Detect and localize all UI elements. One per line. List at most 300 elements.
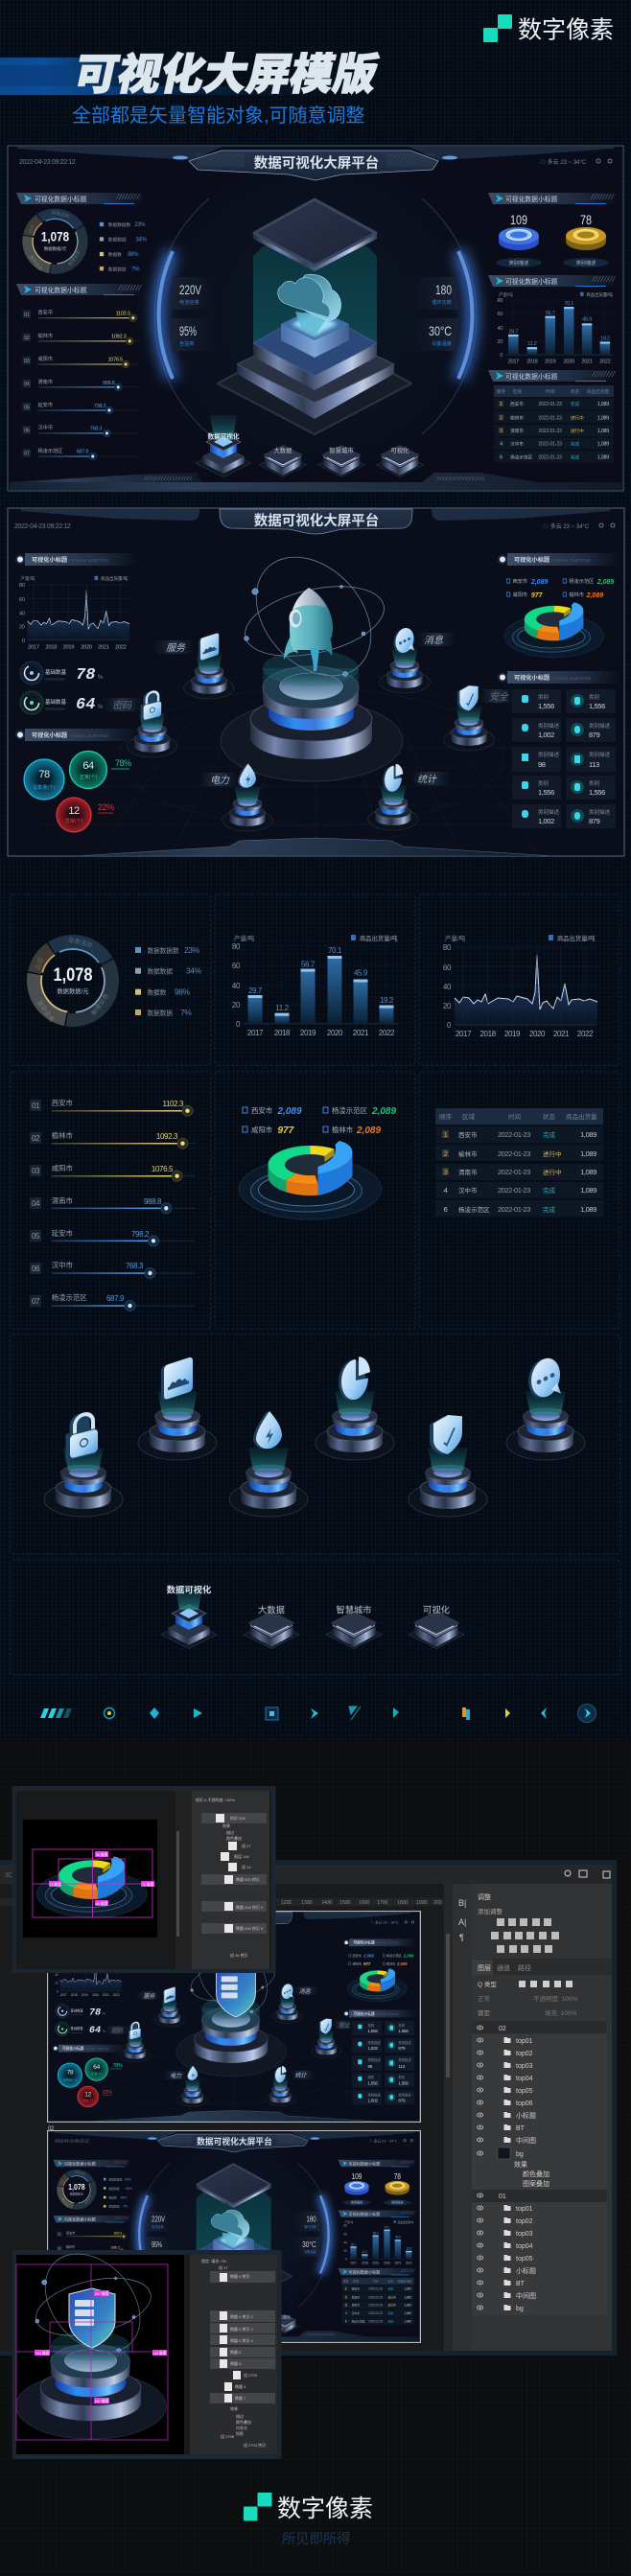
- icon: arrow: [505, 1708, 510, 1718]
- ranking list: 1092.3: [156, 1132, 178, 1141]
- data table: [435, 1108, 603, 1217]
- bar chart: 19.2: [380, 996, 394, 1005]
- magenta measure guides: [16, 2264, 168, 2440]
- layer rows: 组 36 拷贝: [230, 1952, 248, 1958]
- logo: brand bottom: 数字像素: [277, 2495, 373, 2522]
- layer rows: 描边: [226, 1829, 234, 1835]
- card grid: 类别描述: [589, 722, 611, 730]
- ranking list: 05: [32, 1232, 40, 1241]
- stat panels: 180: [435, 282, 452, 297]
- layer list: bg: [516, 2306, 524, 2312]
- data table: 1,089: [580, 1130, 596, 1139]
- card grid: 类别描述: [538, 808, 560, 816]
- bottom frame bar: [10, 473, 621, 490]
- layer rows: 内发光: [236, 2425, 247, 2430]
- layer rows: 颜色叠加: [226, 1835, 242, 1841]
- icon: target: [104, 1708, 115, 1718]
- data table: 完成: [543, 1130, 556, 1139]
- layer list: 小标题: [516, 2266, 536, 2275]
- layer list: 小标题: [516, 2111, 536, 2120]
- overlay window: pedestal layers: 247 像素: [95, 2290, 108, 2296]
- panel: nav buttons: 智慧城市: [336, 1605, 372, 1614]
- small pedestal: statistics: [368, 763, 418, 830]
- bubble: total: [24, 759, 64, 800]
- card grid: 1,556: [538, 788, 554, 797]
- small pedestal: safety: [444, 684, 494, 751]
- layer rows: 椭圆 7: [235, 2395, 246, 2401]
- donut legend: 98%: [175, 987, 191, 997]
- bar chart: 产量/吨: [234, 934, 255, 942]
- icon: square: [266, 1707, 278, 1720]
- layer list: top04: [516, 2076, 533, 2082]
- tag: safety: [479, 689, 514, 703]
- ranking list: 咸阳市: [52, 1164, 73, 1172]
- overlay window: pedestal layers: 144 像素: [35, 2350, 49, 2356]
- layer rows: 锁定: 填充: 0%: [201, 2258, 227, 2263]
- title bar: line chart: / VISUAL SUBTITLE: [69, 558, 108, 563]
- data table: 状态: [543, 1112, 556, 1121]
- central pedestal with orbits: [221, 535, 403, 781]
- data table: 2: [444, 1149, 448, 1158]
- stat panels: 95%: [179, 323, 197, 338]
- title bar: bubbles: [16, 729, 137, 741]
- ruler numbers: 1500: [339, 1900, 350, 1906]
- layer rows: 效果: [222, 1822, 230, 1828]
- ring chart in canvas: [36, 1856, 147, 1917]
- panel row 1: line chart: [419, 894, 619, 1065]
- data table: 6: [444, 1205, 448, 1214]
- ruler numbers: 1800: [397, 1900, 408, 1906]
- ranking list small: [23, 309, 138, 460]
- card grid: 类别: [589, 693, 599, 701]
- title bar: rings: [488, 193, 618, 204]
- bubble: abnormal: 异常(个): [65, 818, 82, 824]
- header bar: [17, 147, 614, 180]
- photoshop window: [0, 1860, 617, 2356]
- percent 22: 22%: [98, 802, 114, 812]
- layer list: 效果: [514, 2160, 527, 2169]
- panel: nav buttons: 可视化: [423, 1605, 450, 1614]
- ranking list: 02: [32, 1134, 40, 1143]
- ruler numbers: 1900: [416, 1900, 427, 1906]
- data table: 西安市: [458, 1130, 478, 1139]
- ranking list: 768.3: [126, 1262, 144, 1270]
- data table: 完成: [543, 1205, 556, 1214]
- icon: book: [462, 1707, 470, 1720]
- layer rows: 椭圆 4: [235, 2383, 246, 2389]
- ranking list: 06: [32, 1265, 40, 1273]
- rocket: [284, 588, 333, 671]
- overlay window: ring chart layers: [12, 1786, 276, 1973]
- stat panels: [170, 277, 459, 351]
- gauge: 78%: Infrastructure: [45, 677, 65, 681]
- data table: 1,089: [580, 1205, 596, 1214]
- layer rows: [201, 2258, 275, 2448]
- data table: 区域: [462, 1112, 476, 1121]
- data table: 3: [444, 1168, 448, 1176]
- pedestal: pie: [316, 1355, 394, 1460]
- gauge: 64%: Infrastructure: [45, 708, 65, 711]
- layer rows: 矩形 6 不透明度: 100%: [196, 1797, 235, 1802]
- ruler numbers: 1400: [321, 1900, 332, 1906]
- icon: stripes: [40, 1708, 72, 1718]
- blue ring stat: 109: [510, 213, 527, 227]
- table small: [494, 385, 614, 462]
- small pedestal: service: [184, 633, 234, 699]
- bar chart: 70.1: [328, 946, 342, 955]
- data table: 完成: [543, 1186, 556, 1195]
- ranking list: 988.8: [144, 1197, 162, 1206]
- bubble: total: 总数量(个): [33, 784, 56, 791]
- ranking list: 01: [32, 1102, 40, 1110]
- icon: glass cloud: [278, 274, 341, 337]
- 3d ring with legend: 杨凌示范区: [332, 1106, 368, 1115]
- stat panels: 设备温度: [432, 339, 452, 347]
- tag: message: 消息: [424, 635, 443, 646]
- card grid: 类别描述: [538, 751, 560, 758]
- bubble: total: 78: [38, 769, 50, 780]
- toolbar icons: [565, 1870, 610, 1878]
- title bar: line chart: 可视化小标题: [32, 556, 68, 564]
- data table: 渭南市: [458, 1168, 478, 1176]
- layer rows: 椭圆 8: [230, 2360, 242, 2366]
- logo: brand top: [483, 14, 614, 44]
- adjustment panel: [478, 1892, 559, 1953]
- layer rows: 描边: [236, 2413, 244, 2419]
- bar chart: 2019: [300, 1029, 316, 1037]
- panel row 1: bar chart: [215, 894, 415, 1065]
- 3d ring with legend: 2,089: [371, 1106, 396, 1117]
- ranking list: 延安市: [52, 1229, 73, 1238]
- layer rows: 椭圆 6 拷贝: [230, 2273, 249, 2279]
- donut legend: 数据数据: [148, 967, 173, 976]
- main title: 可视化大屏模版: [70, 50, 383, 99]
- layer list: top05: [516, 2256, 533, 2263]
- gauge: 78%: 78: [76, 666, 95, 685]
- percent 78: 78%: [115, 758, 131, 768]
- ranking list: 1102.3: [163, 1100, 184, 1108]
- layer rows: 椭圆 6: [230, 2349, 242, 2355]
- 3d ring with legend: 咸阳市: [251, 1126, 273, 1134]
- ranking list: 687.9: [106, 1294, 125, 1303]
- overlay window: ring chart layers: 44 像素: [96, 1900, 107, 1906]
- card grid: [512, 689, 616, 828]
- floor grid: [19, 673, 614, 853]
- donut legend: 7%: [180, 1008, 192, 1017]
- card grid: 类别: [538, 693, 549, 701]
- blue ring stat: 类别描述: [509, 259, 528, 267]
- panel: nav buttons: 大数据: [258, 1605, 285, 1614]
- isometric central stack: [218, 199, 411, 434]
- nav buttons: [196, 415, 424, 477]
- title bar: table: 可视化数据小标题: [505, 372, 558, 381]
- artboard 02: [48, 1912, 420, 2132]
- gauge: 78%: 基础数基: [45, 668, 67, 676]
- bubble: abnormal: [57, 798, 91, 832]
- donut chart: 新增业务: [89, 991, 110, 1017]
- header bar: [21, 509, 610, 534]
- bar chart small: [498, 291, 614, 365]
- stat panels: 含益率: [179, 339, 195, 347]
- logo: brand bottom: [244, 2493, 373, 2522]
- tag: service: 服务: [166, 642, 186, 654]
- overlay window: pedestal layers: 144 像素: [152, 2350, 166, 2356]
- card grid: 1,556: [589, 788, 605, 797]
- title bar: ring: [499, 553, 619, 566]
- pedestal: shield: [409, 1411, 487, 1517]
- icon: play: [194, 1708, 202, 1718]
- bottom hump: [77, 838, 554, 856]
- ruler numbers: [281, 1900, 442, 1906]
- data table: 2022-01-23: [498, 1168, 530, 1176]
- 3d ring with legend: 榆林市: [332, 1126, 354, 1134]
- gauge: 78%: [20, 661, 104, 685]
- shield illustration: [69, 2288, 115, 2348]
- layer list: top01: [516, 2038, 533, 2045]
- nav buttons: 数据可视化: [208, 431, 240, 441]
- photoshop window: 3D: [5, 1872, 13, 1879]
- ranking list: 798.2: [131, 1230, 150, 1239]
- layer filters: 填充: 100%: [545, 2008, 576, 2017]
- tag: safety: 安全: [489, 691, 509, 703]
- layer list: 01: [499, 2193, 506, 2200]
- title bar: ring: / VISUAL SUBTITLE: [551, 558, 591, 563]
- layer list: top06: [516, 2100, 533, 2107]
- donut chart: 复杂业务: [35, 998, 57, 1024]
- tag: statistics: 统计: [417, 774, 437, 785]
- date time: 2022-04-23 09:22:12: [14, 523, 71, 530]
- bubble: normal: 正常(个): [80, 774, 97, 780]
- small pedestal: message: [380, 626, 430, 693]
- stat panels: 循环次数: [432, 298, 453, 306]
- layer list: top02: [516, 2051, 533, 2057]
- tag: password: 密码: [112, 700, 132, 711]
- bar chart: 20: [232, 1001, 241, 1010]
- donut chart: 1,078: [54, 965, 92, 986]
- dashboard frame 1: [8, 146, 623, 491]
- card grid: 1,002: [538, 731, 554, 739]
- overlay window: ring chart layers: 36 像素: [96, 1851, 107, 1857]
- layer filters: Q 类型: [478, 1980, 497, 1988]
- layer rows: 椭圆 6 拷贝 4: [230, 2337, 254, 2343]
- donut chart: [33, 935, 112, 1024]
- tag: power: [199, 773, 239, 786]
- layer rows: 效果: [230, 2405, 238, 2411]
- title bar: ring chart: 可视化数据小标题: [35, 195, 87, 203]
- title bar: rings: 可视化数据小标题: [505, 195, 558, 203]
- card grid: 类别: [538, 779, 549, 787]
- ranking list: 杨凌示范区: [52, 1293, 87, 1302]
- bar chart: 60: [232, 962, 241, 970]
- data table: 4: [444, 1186, 448, 1195]
- bar chart: 56.7: [301, 961, 316, 968]
- panel row 2: ranking: [10, 1072, 211, 1329]
- overlay window: pedestal layers: 247 像素: [95, 2398, 108, 2403]
- title bar: cards: [499, 671, 619, 684]
- blue ring stat: [496, 213, 542, 267]
- layer list: top05: [516, 2088, 533, 2095]
- date time: 2022-04-23 09:22:12: [19, 159, 76, 166]
- 3d ring chart small: [504, 577, 614, 658]
- bar chart: 2020: [327, 1029, 343, 1037]
- donut legend: 数据数据: [148, 1009, 173, 1017]
- layer rows: 矩形 594: [230, 1815, 246, 1821]
- data table: 1,089: [580, 1186, 596, 1195]
- title bar: ranking: [16, 284, 145, 295]
- tool strip glyphs: B|: [458, 1898, 466, 1908]
- gold ring stat: 78: [580, 213, 592, 227]
- nav buttons: 智慧城市: [329, 446, 354, 454]
- gauge: 64%: [20, 691, 104, 714]
- layer tabs: 通道: [497, 1963, 510, 1972]
- bar chart: 80: [232, 942, 241, 951]
- subtitle: 全部都是矢量智能对象,可随意调整: [72, 104, 365, 127]
- bar chart: 2018: [274, 1029, 291, 1037]
- donut legend small: [100, 221, 148, 272]
- title bar: bubbles: / VISUAL SUBTITLE: [69, 733, 108, 738]
- title bar: line chart: [16, 553, 137, 566]
- layer rows: 投影: [236, 2430, 244, 2436]
- gauge: 64%: 64: [76, 696, 95, 714]
- ranking list: 04: [32, 1199, 40, 1208]
- tag: password: [103, 698, 143, 711]
- card grid: 类别描述: [589, 808, 611, 816]
- card grid: 类别: [589, 779, 599, 787]
- small pedestal: password: [127, 689, 177, 757]
- layer rows: 组 2706: [221, 2433, 235, 2439]
- ranking list: 榆林市: [52, 1131, 73, 1140]
- overlay window: ring chart layers: 71 像素: [49, 1881, 61, 1887]
- stat panels: 30°C: [429, 323, 452, 338]
- stat panels: 电池容量: [179, 298, 199, 306]
- data table: 2022-01-23: [498, 1186, 530, 1195]
- pedestal: document: [138, 1357, 217, 1460]
- layer list: 02: [499, 2026, 506, 2032]
- ranking list: 03: [32, 1167, 40, 1175]
- title bar: ring chart: [16, 193, 145, 204]
- layer list: top03: [516, 2231, 533, 2238]
- title bar: table: [488, 370, 618, 382]
- card grid: 1,556: [589, 702, 605, 710]
- data table: 进行中: [543, 1168, 562, 1176]
- 3d ring with legend: 2,089: [276, 1106, 302, 1117]
- layer rows: 椭圆 616 拷贝 6: [236, 1925, 264, 1931]
- magenta measure guides: [33, 1849, 152, 1917]
- data table: 1,089: [580, 1149, 596, 1158]
- donut chart: 合动: [33, 956, 45, 971]
- adjustment panel: 添加调整: [478, 1907, 502, 1915]
- bar chart: 11.2: [275, 1004, 290, 1012]
- layer rows: 椭圆 620 拷贝: [236, 1876, 260, 1882]
- data table: 时间: [508, 1112, 521, 1121]
- bar chart: 40: [232, 982, 241, 990]
- layer filters: [478, 1980, 577, 2017]
- layer list: [472, 2021, 607, 2315]
- title bar: bubbles: 可视化小标题: [32, 731, 68, 739]
- central halo: [154, 159, 477, 474]
- layer rows: 图层 144: [234, 1853, 250, 1859]
- gauge: 64%: 基础数基: [45, 698, 67, 706]
- panel row 2: 3d ring: [215, 1072, 415, 1329]
- title banner: [0, 58, 345, 95]
- adjustment panel: 调整: [478, 1892, 491, 1901]
- nav buttons: 大数据: [273, 446, 292, 454]
- data table: 2022-01-23: [498, 1130, 530, 1139]
- card grid: 879: [589, 817, 600, 825]
- orbit rings: [233, 535, 394, 698]
- bar chart: [232, 934, 399, 1037]
- weather: ☁ 多云 23 ~ 34°C: [543, 522, 590, 530]
- line chart small: [19, 575, 129, 650]
- layer list: top02: [516, 2218, 533, 2225]
- data table: 1,089: [580, 1168, 596, 1176]
- bubble: normal: 64: [82, 760, 94, 772]
- small pedestal: power: [222, 762, 272, 831]
- layer rows: 组 2703 拷贝: [244, 2442, 266, 2448]
- 3d ring with legend: 2,089: [356, 1126, 381, 1136]
- icon row: [40, 1705, 596, 1722]
- gauge: 78%: %: [98, 675, 104, 681]
- layer list: top03: [516, 2063, 533, 2070]
- artboard 02: 02: [48, 2126, 55, 2132]
- title bar: cards: 可视化小标题: [514, 674, 550, 682]
- layer tabs: 图层: [478, 1964, 491, 1972]
- icon: chevron left: [541, 1707, 547, 1719]
- pedestal: lock: [44, 1410, 123, 1517]
- layer rows: 椭圆 6 拷贝 3: [230, 2313, 254, 2319]
- overlay window: pedestal layers: [12, 2236, 282, 2459]
- data table: 汉中市: [458, 1186, 478, 1195]
- bar chart: 2021: [353, 1029, 369, 1037]
- data table: 2022-01-23: [498, 1149, 530, 1158]
- layer list: 中间图: [516, 2136, 536, 2145]
- header bar: 数据可视化大屏平台: [254, 154, 379, 172]
- data table: 进行中: [543, 1149, 562, 1158]
- tool strip glyphs: [458, 1898, 466, 1942]
- data table: 1: [444, 1130, 448, 1139]
- layer tabs: [472, 1960, 531, 1975]
- ranking list: 渭南市: [52, 1196, 73, 1205]
- icon: chevron: [311, 1708, 318, 1719]
- bar chart: 29.7: [248, 986, 263, 995]
- icon: diamond: [150, 1707, 159, 1719]
- layer list: 颜色叠加: [523, 2170, 549, 2178]
- donut legend: 数据数据数: [148, 946, 179, 955]
- layer rows: 组 2705: [244, 2372, 258, 2378]
- footer tagline: 所见即所得: [282, 2531, 350, 2547]
- bar chart: 商品出货量/吨: [360, 934, 398, 942]
- panel row 2: table: [419, 1072, 619, 1329]
- layer list: 中间图: [516, 2291, 536, 2300]
- tag: service: [153, 640, 194, 654]
- logo: brand top: 数字像素: [518, 17, 614, 44]
- donut legend: 数据数: [148, 988, 167, 997]
- layer rows: [196, 1797, 267, 1958]
- tool strip glyphs: ¶: [459, 1933, 464, 1942]
- panel: isometric pedestals: [10, 1334, 619, 1554]
- layer rows: 椭圆 6 拷贝 2: [230, 2326, 254, 2332]
- bar chart: 2022: [379, 1029, 395, 1037]
- layer list: BT: [516, 2125, 526, 2132]
- card grid: 类别描述: [589, 751, 611, 758]
- card grid: 879: [589, 731, 600, 739]
- card grid: 98: [538, 760, 546, 769]
- tag: message: [416, 633, 456, 646]
- tool strip glyphs: A|: [458, 1917, 466, 1927]
- ruler numbers: 1300: [301, 1900, 312, 1906]
- layer filters: 锁定:: [478, 2008, 492, 2017]
- gauge: 64%: %: [98, 705, 104, 710]
